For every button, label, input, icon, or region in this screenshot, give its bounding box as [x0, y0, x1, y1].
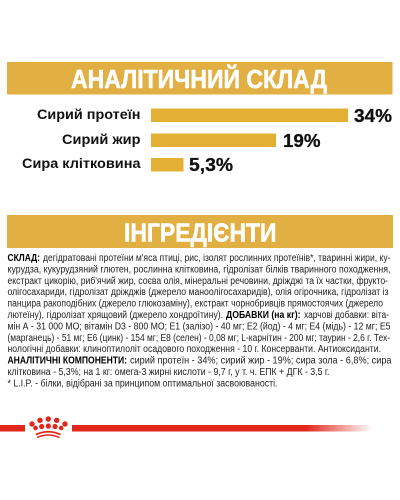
text block: ingredients list [8, 253, 391, 355]
bar row: crude fibre [22, 154, 233, 175]
text block: analytical components: клітковина - 5,3%; на 1 кг: омега-3 жирні кислоти - 9,7 г, у т. ч. ЕПК + ДГК - 3,5 г. [8, 367, 330, 378]
heading banner: analytical composition: АНАЛІТИЧНИЙ СКЛАД [71, 64, 327, 94]
bar row: crude protein [37, 105, 392, 126]
text block: ingredients list: лютеїну), гідролізат хрящовий (джерело хондроїтину). [8, 310, 223, 321]
heading banner: ingredients: ІНГРЕДІЄНТИ [124, 218, 276, 248]
bar row: crude protein: 34% [354, 105, 392, 126]
bar row: crude fat: Сирий жир [62, 131, 140, 147]
bar row: crude fibre: Сира клітковина [22, 155, 141, 171]
text block: analytical components: АНАЛІТИЧНІ КОМПОНЕНТИ: [8, 356, 127, 367]
heading banner: ingredients [7, 215, 393, 248]
text block: ingredients list: СКЛАД: [8, 253, 40, 264]
heading banner: analytical composition [7, 62, 392, 94]
text block: analytical components: * L.I.P. - білки, відібрані за принципом оптимальної засвоюваності. [8, 377, 278, 389]
panel: analytical composition [7, 62, 392, 175]
icon: crown logo [29, 416, 68, 438]
bar row: crude fat: 19% [283, 130, 320, 151]
text block: analytical components [8, 356, 392, 389]
text block: ingredients list: ДОБАВКИ (на кг): [226, 310, 300, 321]
bar row: crude protein: Сирий протеїн [37, 106, 140, 122]
bar row: crude fibre: 5,3% [189, 154, 233, 175]
brand strip with crown logo [0, 416, 372, 438]
bar row: crude fat [62, 130, 320, 151]
